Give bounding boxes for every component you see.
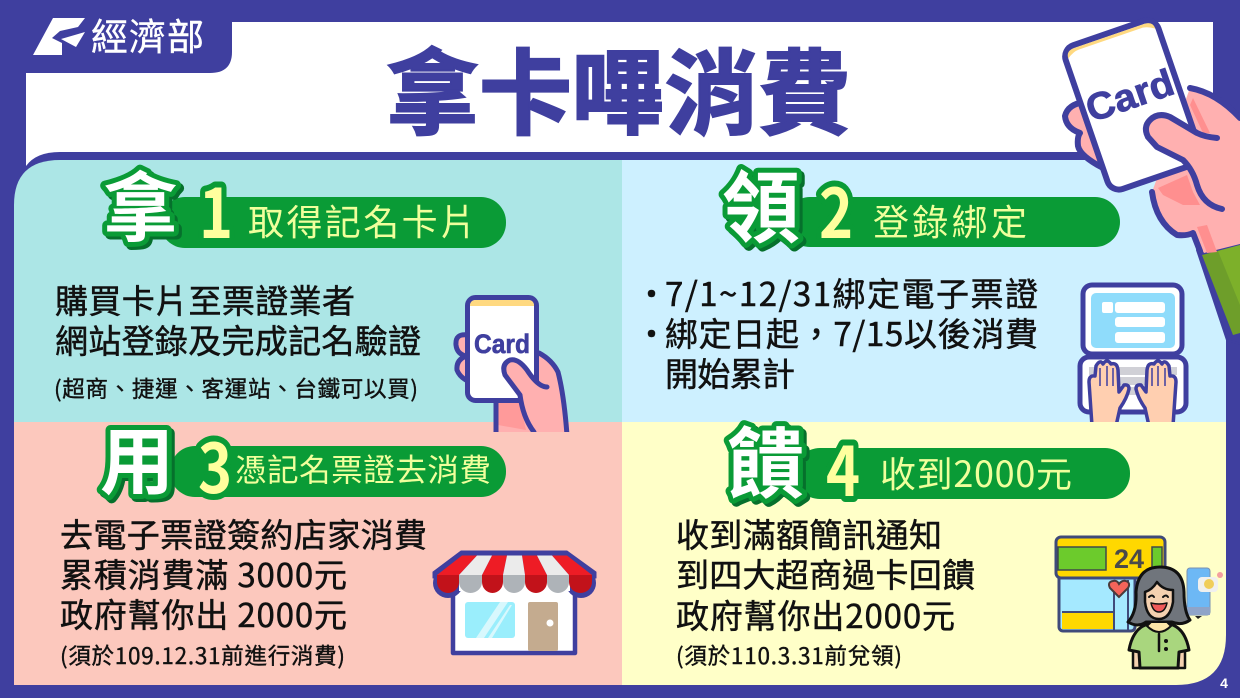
panel: step 2 bbox=[635, 147, 1186, 426]
step 1 number: 1 bbox=[199, 160, 233, 258]
step 2 text: • bbox=[635, 308, 668, 356]
step 4 text: 政府幫你出2000元 bbox=[676, 590, 955, 638]
fingers bbox=[1065, 102, 1103, 168]
icon: hand holding card: Card bbox=[474, 329, 530, 359]
step 3 text: (須於109.12.31前進行消費) bbox=[60, 639, 345, 671]
icon: hand holding card bbox=[456, 298, 567, 435]
step 2 pill bbox=[785, 197, 1120, 247]
step 3 text: 累積消費滿 3000元 bbox=[60, 549, 347, 597]
step 1 text: 網站登錄及完成記名驗證 bbox=[55, 315, 421, 363]
step 4 text: 收到滿額簡訊通知 bbox=[676, 509, 942, 557]
step 4 big character: 饋 bbox=[727, 404, 804, 515]
step 3 big character: 用 bbox=[100, 403, 174, 510]
icon: heart bbox=[1109, 581, 1129, 597]
step 2 text bbox=[635, 268, 1038, 396]
hand back bbox=[1152, 88, 1240, 253]
step 1 text: 購買卡片至票證業者 bbox=[55, 275, 355, 323]
step 1 big character: 拿 bbox=[103, 148, 178, 257]
store sign number: 24 bbox=[1114, 544, 1144, 574]
step 3 big character: 用 bbox=[103, 406, 177, 513]
panel: four steps background bbox=[14, 160, 1226, 685]
step 3 text: 去電子票證簽約店家消費 bbox=[60, 509, 427, 557]
step 2 heading: 登錄綁定 bbox=[873, 194, 1027, 246]
icon: phone bbox=[1187, 568, 1223, 619]
step 4 big character: 饋 bbox=[730, 407, 807, 518]
step 3 text bbox=[60, 509, 427, 671]
step 2 text: 開始累計 bbox=[665, 348, 795, 396]
icon: ministry logo bbox=[33, 18, 85, 55]
step 1 text bbox=[54, 275, 421, 404]
logo tab bbox=[26, 0, 232, 73]
step 4 number: 4 bbox=[826, 418, 860, 516]
step 2 big character: 領 bbox=[722, 147, 800, 259]
icon: convenience store and customer bbox=[1056, 537, 1223, 668]
icon: large hand holding card bbox=[1062, 17, 1240, 344]
panel: step 1 bbox=[54, 148, 567, 435]
step 1 text: (超商、捷運、客運站、台鐵可以買) bbox=[54, 372, 418, 404]
page number: 4 bbox=[1220, 675, 1228, 691]
step 3 number: 3 bbox=[198, 415, 232, 513]
step 2 text: 7/1~12/31綁定電子票證 bbox=[665, 268, 1038, 316]
step 4 text bbox=[676, 509, 975, 671]
step 1 big character: 拿 bbox=[106, 151, 181, 260]
step 2 text: • bbox=[635, 268, 668, 316]
card bbox=[1062, 17, 1204, 193]
step 2 big character: 領 bbox=[725, 150, 803, 262]
icon: storefront bbox=[433, 551, 596, 653]
step 2 text: 綁定日起，7/15以後消費 bbox=[665, 308, 1038, 356]
panel: step 4 bbox=[676, 404, 1223, 671]
step 2 number: 2 bbox=[819, 160, 853, 258]
title: 拿卡嗶消費 bbox=[386, 19, 851, 154]
card label: Card bbox=[1081, 62, 1179, 131]
step 3 heading: 憑記名票證去消費 bbox=[235, 445, 491, 491]
header panel bbox=[26, 22, 1240, 200]
step 3 text: 政府幫你出 2000元 bbox=[60, 589, 347, 637]
icon: laptop with typing hands bbox=[1080, 285, 1186, 426]
woman figure bbox=[1128, 567, 1190, 668]
step 4 pill bbox=[795, 448, 1130, 499]
step 4 heading: 收到2000元 bbox=[880, 446, 1072, 498]
logo text: 經濟部 bbox=[91, 7, 204, 61]
step 4 text: 到四大超商過卡回饋 bbox=[676, 549, 975, 597]
panel: step 3 bbox=[60, 403, 596, 671]
sleeve bbox=[1197, 238, 1240, 344]
step 4 text: (須於110.3.31前兌領) bbox=[676, 639, 902, 671]
step 1 heading: 取得記名卡片 bbox=[248, 194, 476, 246]
step 1 pill bbox=[160, 197, 506, 248]
step 3 pill bbox=[170, 446, 506, 497]
thumb bbox=[1146, 115, 1240, 210]
